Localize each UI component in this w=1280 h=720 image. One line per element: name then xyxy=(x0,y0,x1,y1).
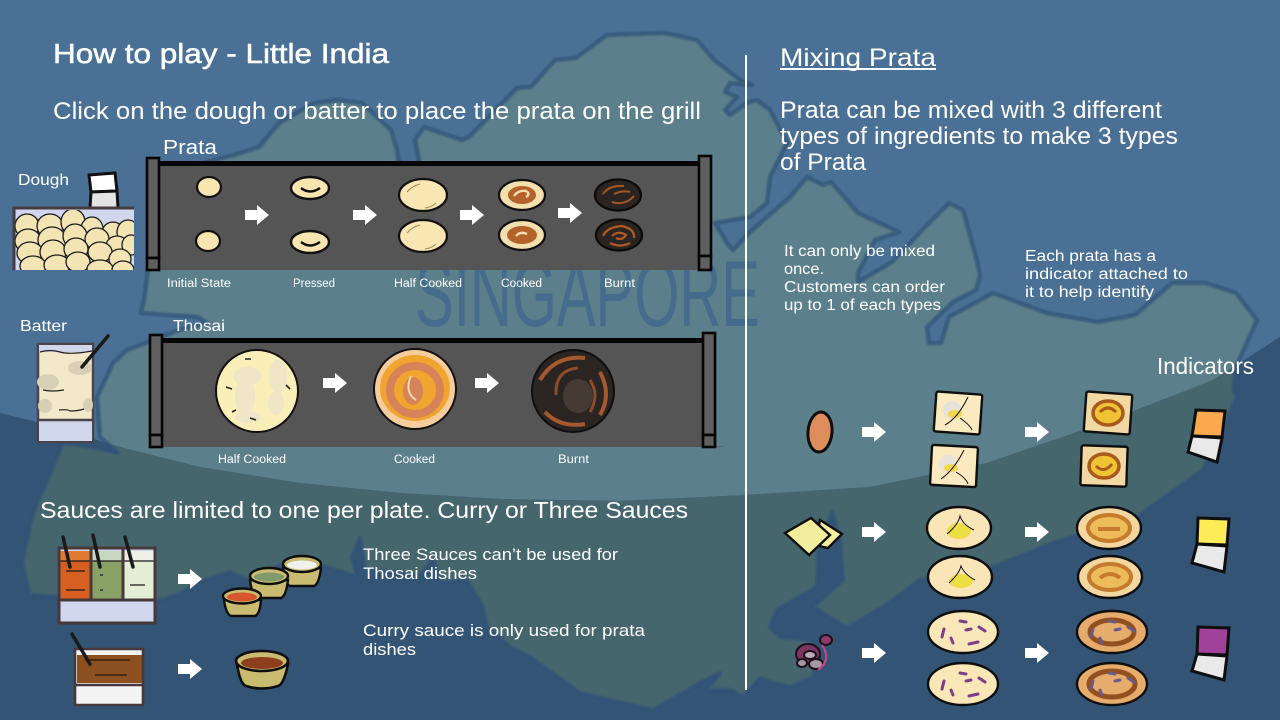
grill surface xyxy=(150,340,725,447)
text: curry note xyxy=(363,621,646,659)
arrow xyxy=(323,373,347,393)
egg prata raw xyxy=(930,391,982,487)
arrow xyxy=(353,205,377,225)
container edge xyxy=(14,208,134,270)
row: egg prata xyxy=(806,391,1225,487)
batter texture xyxy=(37,361,93,413)
dough balls xyxy=(16,210,134,270)
arrow xyxy=(1025,643,1049,663)
indicator: yellow xyxy=(1192,518,1229,572)
text: mixing intro: types of ingredients to make 3 types xyxy=(780,123,1178,150)
text: three sauces note: Three Sauces can’t be used for xyxy=(363,545,618,564)
prata burnt xyxy=(595,180,642,250)
batter lower xyxy=(39,421,92,441)
left post xyxy=(150,335,162,447)
grill top bar xyxy=(158,161,700,166)
prata cooked xyxy=(499,180,545,250)
heading: Indicators: Indicators xyxy=(1157,353,1254,379)
text: indicator note: Each prata has a xyxy=(1025,248,1156,265)
text: mix rule: Customers can order xyxy=(784,279,945,296)
label: Thosai: Thosai xyxy=(173,318,225,335)
prata stage labels xyxy=(167,278,636,290)
darker lower band: sea xyxy=(0,337,1280,720)
panel: thosai grill xyxy=(150,333,725,447)
instruction text: Click on the dough or batter to place the prata on the grill xyxy=(53,98,701,125)
divider xyxy=(745,55,747,690)
icon: ladle xyxy=(82,336,108,367)
thosai stage labels: Burnt xyxy=(558,454,590,466)
text: mix rule: up to 1 of each types xyxy=(784,297,941,314)
thosai half cooked xyxy=(216,350,298,432)
container xyxy=(14,208,134,270)
label: Prata: Prata xyxy=(163,137,218,159)
prata pressed xyxy=(291,177,329,253)
text: indicator note xyxy=(1025,248,1188,301)
text: indicator note: indicator attached to xyxy=(1025,266,1188,283)
text: three sauces note: Thosai dishes xyxy=(363,564,477,583)
icon: onion xyxy=(796,635,832,670)
row: cheese prata xyxy=(785,507,1229,598)
thosai cooked xyxy=(374,349,456,429)
text: indicator note: it to help identify xyxy=(1025,284,1154,301)
left post xyxy=(147,158,159,270)
onion prata cooked xyxy=(1077,611,1147,705)
text: mix rule: It can only be mixed xyxy=(784,243,935,260)
thosai burnt xyxy=(532,350,614,432)
grill top bar xyxy=(160,338,704,343)
prata stage labels: Cooked xyxy=(501,278,542,290)
prata stage labels: Initial State xyxy=(167,278,231,290)
text: curry note: dishes xyxy=(363,640,416,659)
arrow xyxy=(1025,522,1049,542)
thosai stage labels xyxy=(218,454,590,466)
container xyxy=(38,344,93,442)
text: mix rule xyxy=(784,243,945,314)
text: mix rule: once. xyxy=(784,261,824,278)
arrow xyxy=(1025,422,1049,442)
right post xyxy=(703,333,715,447)
panel: dough box xyxy=(12,171,134,270)
panel: batter box xyxy=(20,318,108,442)
prata stage labels: Half Cooked xyxy=(394,278,462,290)
arrow xyxy=(460,205,484,225)
text: mixing intro xyxy=(780,97,1178,176)
icon: three sauce bowls xyxy=(223,556,321,616)
prata half cooked xyxy=(399,179,447,252)
arrow xyxy=(178,659,202,679)
icon: egg xyxy=(806,411,834,453)
icon: cheese xyxy=(785,518,842,555)
map label: Singapore: SINGAPORE xyxy=(415,241,760,346)
title: How to play - Little India xyxy=(53,38,389,69)
icon: three sauce container xyxy=(58,535,156,623)
prata initial state xyxy=(196,177,221,251)
thosai stage labels: Half Cooked xyxy=(218,454,286,466)
text: curry note: Curry sauce is only used for prata xyxy=(363,621,646,640)
darker lower band: land xyxy=(24,368,1235,708)
indicator: purple xyxy=(1192,627,1229,680)
indicator: orange xyxy=(1188,410,1225,462)
arrow xyxy=(475,373,499,393)
arrow xyxy=(862,422,886,442)
cheese prata cooked xyxy=(1077,507,1142,598)
prata stage labels: Pressed xyxy=(293,278,335,290)
cheese prata raw xyxy=(927,507,992,598)
arrow xyxy=(245,205,269,225)
grill surface xyxy=(146,163,712,270)
icon: curry bowl xyxy=(236,651,288,688)
text: mixing intro: Prata can be mixed with 3 different xyxy=(780,97,1162,124)
right post xyxy=(699,156,711,270)
row: onion prata xyxy=(796,611,1229,705)
thosai stage labels: Cooked xyxy=(394,454,435,466)
arrow xyxy=(862,522,886,542)
heading: Mixing Prata: Mixing Prata xyxy=(780,44,936,72)
arrow xyxy=(178,569,202,589)
arrow xyxy=(558,203,582,223)
label: Dough: Dough xyxy=(18,172,69,189)
text: three sauces note xyxy=(363,545,618,583)
icon: curry container xyxy=(72,634,143,705)
label: Batter: Batter xyxy=(20,318,68,335)
icon: dough scoop xyxy=(89,173,118,208)
prata stage labels: Burnt xyxy=(604,278,636,290)
arrow xyxy=(862,643,886,663)
panel: prata grill xyxy=(146,156,712,270)
egg prata cooked xyxy=(1080,391,1132,487)
onion prata raw xyxy=(928,611,998,705)
text: mixing intro: of Prata xyxy=(780,149,867,176)
heading: sauces: Sauces are limited to one per plate. Curry or Three Sauces xyxy=(40,497,688,523)
